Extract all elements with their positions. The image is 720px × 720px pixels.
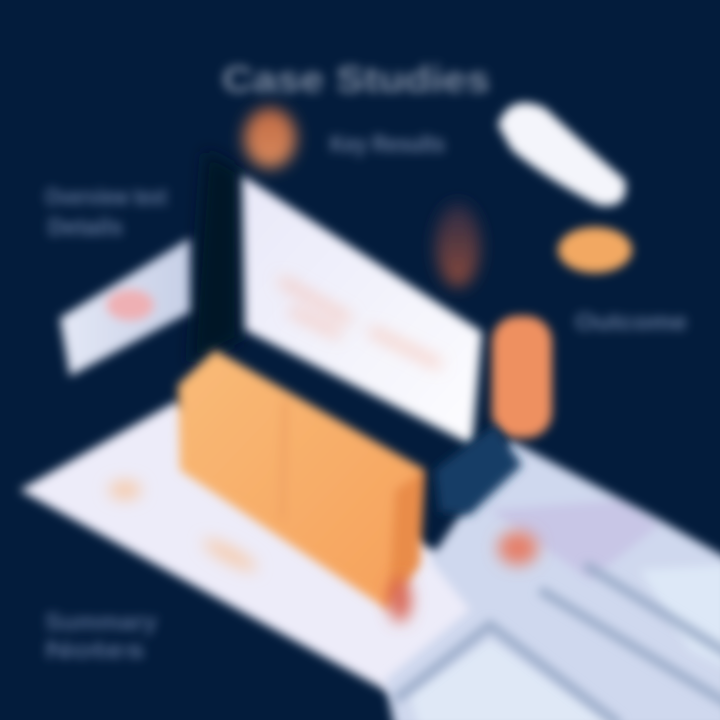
white pin icon (498, 103, 626, 206)
floor orange accents (109, 481, 260, 575)
red tag on box (389, 578, 411, 622)
title: Case Studies (222, 59, 490, 100)
right text block: Outcome (575, 309, 687, 336)
subtitle text: Key Results (330, 131, 445, 158)
white document panel (242, 175, 482, 445)
dark orange figure (436, 203, 480, 287)
document red marks (280, 280, 440, 365)
top orange figure (244, 108, 296, 168)
left card (60, 238, 190, 376)
floor track lines (395, 565, 720, 720)
orange bowl icon (558, 227, 632, 273)
shadow behind document (190, 150, 240, 365)
floor panel (20, 402, 520, 695)
left top text block (45, 184, 167, 241)
red figure detail (498, 531, 538, 565)
dark blue figure (435, 425, 522, 515)
left top text block: Details (48, 214, 123, 241)
bottom left text block (45, 609, 158, 664)
orange boxes (178, 350, 425, 610)
orange cylinder (492, 316, 552, 438)
bottom left text block: Notes (45, 637, 145, 664)
left top text block: Overview text (45, 184, 167, 211)
bottom left text block: Summary (45, 609, 158, 636)
right floor (385, 440, 720, 720)
